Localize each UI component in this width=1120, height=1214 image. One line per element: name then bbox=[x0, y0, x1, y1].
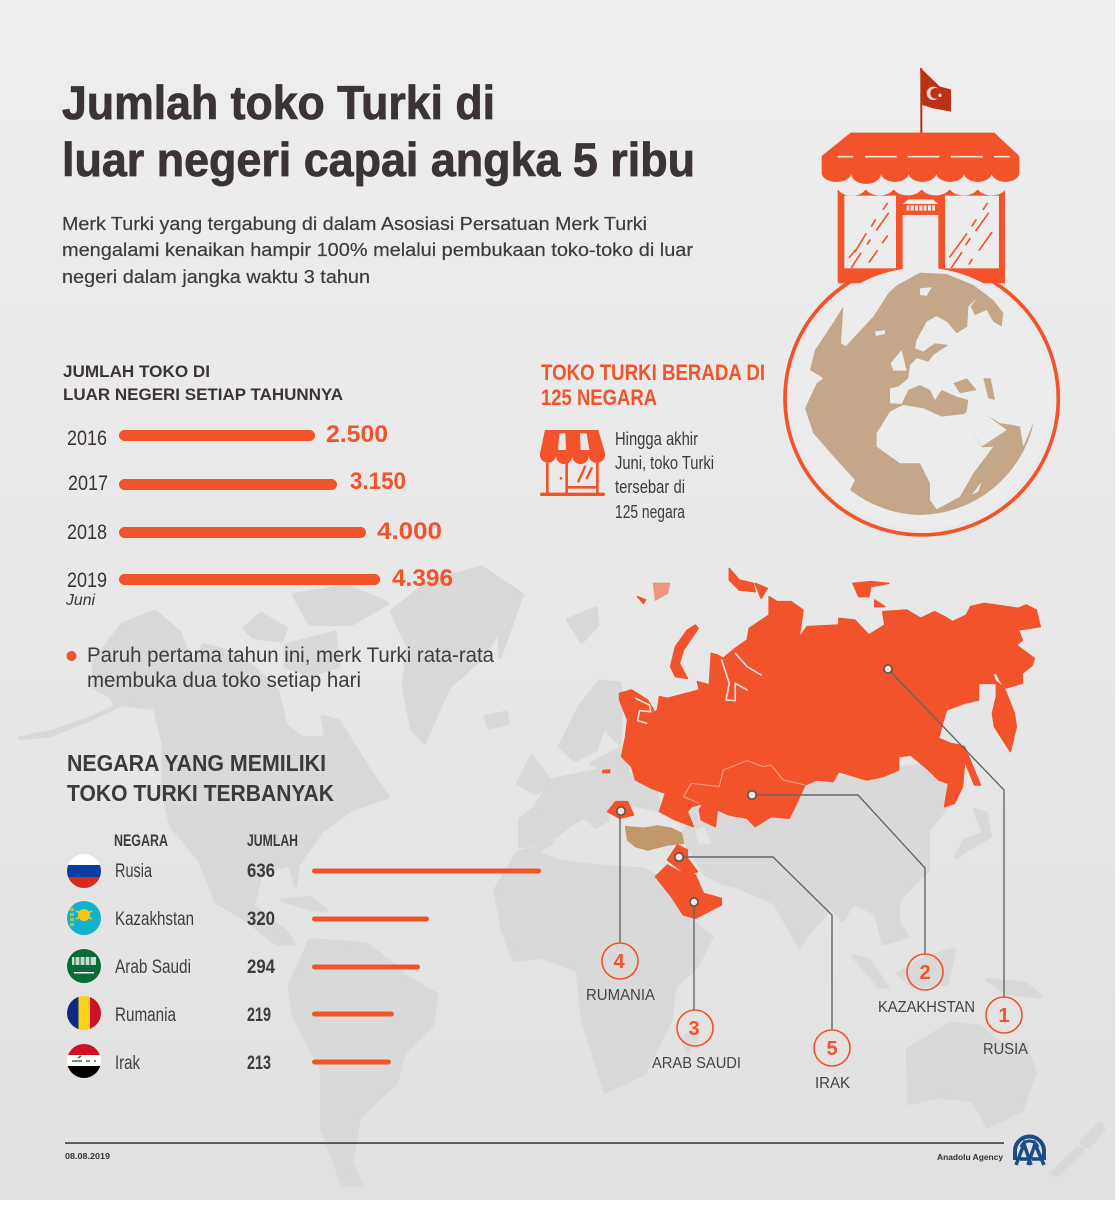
bar chart: stores per year bbox=[65, 421, 453, 609]
globe bbox=[791, 268, 1052, 529]
bar 2016 bbox=[67, 421, 388, 450]
bar 2017 bbox=[68, 468, 406, 495]
row: Irak bbox=[67, 1044, 391, 1078]
bar chart heading: LUAR NEGERI SETIAP TAHUNNYA bbox=[63, 385, 343, 404]
text: store reach bbox=[615, 429, 714, 522]
illustration: Turkish store on a globe bbox=[785, 67, 1058, 535]
rank callout: 3 Arab Saudi: 3 bbox=[688, 1018, 700, 1040]
intro text: negeri dalam jangka waktu 3 tahun bbox=[62, 267, 370, 287]
rank callout: 2 Kazakhstan: 2 bbox=[919, 962, 931, 984]
footer date: 08.08.2019 bbox=[65, 1151, 110, 1161]
bar 2019: 2019 bbox=[67, 569, 107, 592]
bar 2018 bbox=[67, 518, 442, 545]
rank callout: 1 Rusia bbox=[983, 997, 1028, 1058]
bar 2017: 3.150 bbox=[350, 468, 406, 495]
bar 2018: 4.000 bbox=[377, 518, 442, 545]
row: Rumania bbox=[67, 996, 394, 1030]
title bbox=[62, 76, 695, 186]
bar chart heading: JUMLAH TOKO DI bbox=[63, 362, 210, 381]
row: Kazakhstan: Kazakhstan bbox=[115, 909, 194, 930]
text: store reach: tersebar di bbox=[615, 477, 685, 497]
footer rule bbox=[65, 1142, 1004, 1144]
bar 2016: 2.500 bbox=[326, 421, 388, 448]
country: Romania bbox=[608, 802, 634, 818]
bar 2019: Juni bbox=[65, 592, 95, 609]
text: store reach: Hingga akhir bbox=[615, 429, 698, 449]
row: Rumania: 219 bbox=[247, 1005, 271, 1026]
rank callout: 4 Rumania: RUMANIA bbox=[586, 987, 655, 1004]
logo: Anadolu Agency bbox=[1015, 1136, 1044, 1165]
intro text bbox=[62, 214, 693, 287]
table heading: TOKO TURKI TERBANYAK bbox=[67, 780, 334, 806]
row: Kazakhstan: 320 bbox=[247, 909, 275, 930]
title: luar negeri capai angka 5 ribu bbox=[62, 133, 695, 186]
icon: shop bbox=[540, 430, 605, 496]
flag: Russia bbox=[67, 854, 101, 889]
bar 2018: 2018 bbox=[67, 521, 107, 544]
row: Kazakhstan bbox=[67, 901, 429, 935]
row: Rusia bbox=[67, 854, 541, 889]
bullet note bbox=[66, 644, 494, 692]
row: Rusia: 636 bbox=[247, 861, 275, 882]
flag: Saudi Arabia bbox=[67, 949, 101, 983]
rank callout: 5 Irak: IRAK bbox=[815, 1075, 850, 1092]
flag bbox=[920, 67, 951, 133]
flag: Iraq bbox=[67, 1044, 101, 1078]
rank callout: 4 Rumania bbox=[586, 943, 655, 1004]
rank callout: 3 Arab Saudi: ARAB SAUDI bbox=[652, 1055, 741, 1072]
location markers bbox=[617, 665, 892, 906]
table column headers: NEGARA bbox=[114, 831, 168, 850]
title: Jumlah toko Turki di bbox=[62, 76, 495, 129]
row: Rumania: Rumania bbox=[115, 1005, 176, 1026]
country: Russia bbox=[603, 568, 1040, 827]
shop awning bbox=[822, 133, 1019, 184]
bullet note: membuka dua toko setiap hari bbox=[87, 669, 361, 692]
rank callout: 4 Rumania: 4 bbox=[613, 951, 625, 973]
rank callout: 1 Rusia: RUSIA bbox=[983, 1041, 1028, 1058]
seas cut out of the background map bbox=[540, 827, 712, 868]
background world map bbox=[20, 567, 1104, 1184]
text: store reach: 125 negara bbox=[615, 502, 686, 522]
rank callout: 2 Kazakhstan: KAZAKHSTAN bbox=[878, 999, 975, 1016]
country: Saudi Arabia bbox=[655, 865, 721, 918]
rank callout: 1 Rusia: 1 bbox=[998, 1005, 1010, 1027]
row: Arab Saudi: Arab Saudi bbox=[115, 957, 191, 978]
bullet note: Paruh pertama tahun ini, merk Turki rata-rata bbox=[87, 644, 494, 667]
rank callout: 3 Arab Saudi bbox=[652, 1010, 741, 1072]
country: Iraq bbox=[667, 845, 697, 875]
row: Irak: Irak bbox=[115, 1053, 140, 1074]
row: Rusia: Rusia bbox=[115, 861, 152, 882]
bar 2017: 2017 bbox=[68, 472, 108, 495]
row: Arab Saudi bbox=[67, 949, 420, 983]
rank callout: 5 Irak: 5 bbox=[826, 1038, 838, 1060]
row: Irak: 213 bbox=[247, 1053, 271, 1074]
panel heading: 125 countries bbox=[541, 360, 765, 410]
row: Arab Saudi: 294 bbox=[247, 957, 275, 978]
shop building bbox=[838, 182, 1006, 283]
rank callout: 2 Kazakhstan bbox=[878, 954, 975, 1016]
Kazakhstan border bbox=[683, 761, 805, 803]
map: highlighted countries bbox=[603, 568, 1040, 918]
bar 2016: 2016 bbox=[67, 427, 107, 450]
table heading: NEGARA YANG MEMILIKI bbox=[67, 750, 326, 776]
rank callout: 5 Irak bbox=[814, 1030, 850, 1092]
oceans bbox=[805, 273, 1034, 515]
bar chart heading bbox=[63, 362, 343, 404]
flag: Kazakhstan bbox=[67, 901, 101, 935]
country: Turkey bbox=[626, 826, 683, 850]
bar 2019: 4.396 bbox=[392, 565, 453, 592]
flag: Romania bbox=[67, 996, 102, 1030]
footer credit: Anadolu Agency bbox=[937, 1152, 1003, 1162]
leader lines bbox=[620, 669, 1004, 1030]
intro text: mengalami kenaikan hampir 100% melalui pembukaan toko-toko di luar bbox=[62, 240, 693, 260]
Africa bbox=[877, 405, 993, 509]
intro text: Merk Turki yang tergabung di dalam Asosiasi Persatuan Merk Turki bbox=[62, 214, 647, 234]
table column headers: JUMLAH bbox=[247, 831, 298, 850]
globe ring bbox=[785, 262, 1058, 535]
text: store reach: Juni, toko Turki bbox=[615, 453, 714, 473]
panel heading: 125 countries: TOKO TURKI BERADA DI bbox=[541, 360, 765, 385]
bar 2019 bbox=[65, 565, 453, 609]
table heading bbox=[67, 750, 334, 806]
panel heading: 125 countries: 125 NEGARA bbox=[541, 385, 657, 410]
table column headers bbox=[114, 831, 298, 850]
